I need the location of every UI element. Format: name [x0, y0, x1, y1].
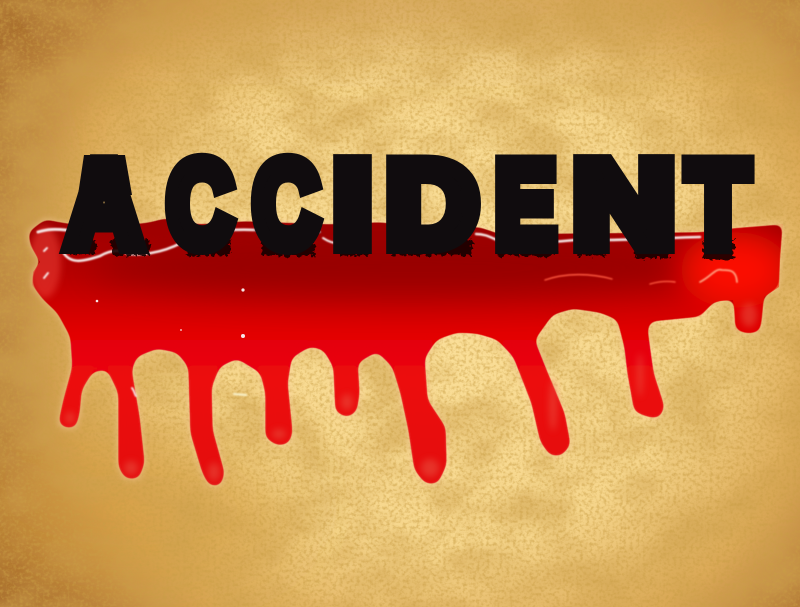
title: ACCIDENT: T: [687, 136, 749, 272]
title: ACCIDENT: A: [66, 136, 142, 272]
lighter drip tips: [65, 303, 757, 481]
glossy highlights: [38, 229, 737, 396]
blood body: [28, 218, 783, 486]
title: ACCIDENT: N: [573, 136, 675, 272]
shading: dark core and bright right end: [29, 226, 790, 308]
title: ACCIDENT: [66, 136, 749, 272]
flat apex of the letter A: [78, 155, 132, 195]
dark smears under the letters: [66, 240, 734, 260]
title: ACCIDENT: I: [333, 136, 372, 272]
title: ACCIDENT: E: [495, 136, 556, 272]
title: ACCIDENT: C: [167, 136, 233, 272]
blood smear with drips: [28, 218, 790, 486]
title: ACCIDENT: C: [253, 136, 319, 272]
title: ACCIDENT: D: [386, 136, 478, 272]
pale halo around blood: [28, 218, 783, 486]
small droplets: [96, 288, 245, 338]
